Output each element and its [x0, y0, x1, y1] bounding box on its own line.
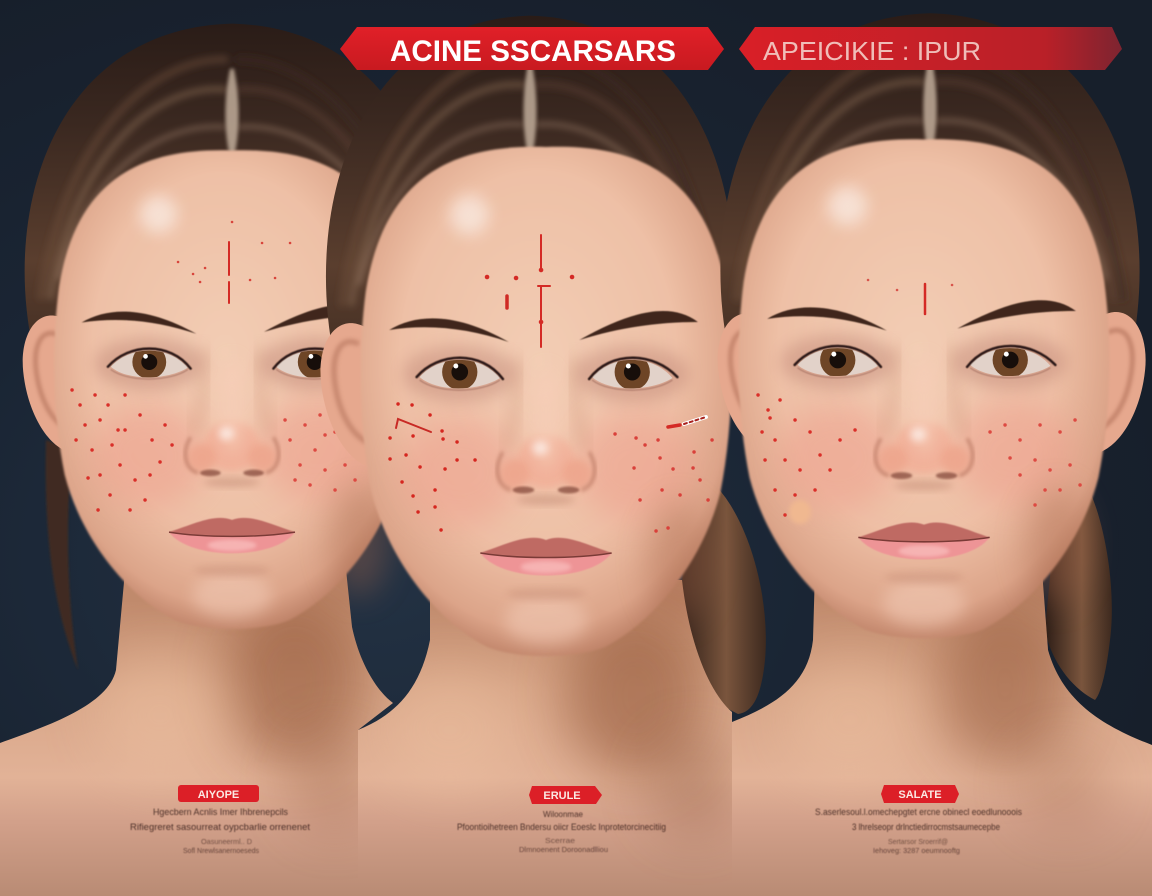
right caption text: 3 lhrelseopr drlnctiedirrocmstsaumecepbe [852, 822, 1000, 833]
right acne marks [758, 280, 1080, 515]
left caption text: Hgecbern Acnlis Imer Ihbrenepcils [153, 807, 288, 818]
left acne marks [72, 222, 355, 510]
right hair [720, 13, 1140, 425]
middle acne marks [390, 235, 712, 531]
panel: right portrait [718, 13, 1152, 896]
middle caption text: Dlmnoenent Doroonadlliou [519, 845, 608, 854]
right cheek patch [789, 500, 811, 524]
middle caption text [457, 809, 666, 854]
left neck and shoulders [0, 560, 393, 896]
title text: ACINE SSCARSARS [390, 35, 676, 68]
banner: main title [340, 27, 724, 70]
right neck and shoulders [732, 570, 1152, 896]
middle neck and shoulders [358, 580, 732, 896]
middle face [361, 147, 731, 656]
middle caption text: Scerrae [545, 836, 575, 845]
right caption text: Iehoveg: 3287 oeumnooftg [873, 846, 960, 855]
middle neck shading [380, 610, 740, 835]
middle hair [326, 16, 734, 431]
left caption text: Oasuneerml.. D [201, 837, 253, 846]
left face [54, 150, 410, 629]
left caption text [130, 807, 310, 855]
right label pill [881, 785, 959, 803]
right caption text [815, 807, 1022, 855]
caption: left panel [130, 785, 310, 855]
panel: left portrait [0, 24, 439, 896]
middle left ear [320, 323, 395, 468]
right label text: SALATE [898, 789, 942, 801]
left hair wisp [46, 440, 78, 670]
caption: right panel [815, 785, 1022, 855]
left hair [25, 24, 439, 418]
middle caption text: Wiloonmae [543, 809, 583, 819]
panel: middle portrait [320, 16, 766, 896]
middle ponytail [678, 470, 766, 714]
middle caption text: Pfoontioihetreen Bndersu oiicr Eoeslc Inprotetorcinecitiig [457, 822, 666, 833]
right ponytail [1045, 450, 1112, 700]
right left ear [718, 314, 788, 451]
right neck shading [785, 600, 1110, 825]
middle label pill [529, 786, 602, 804]
left neck shading [95, 595, 380, 830]
right caption text: Sertarsor Sroerrif@ [888, 837, 948, 846]
left caption text: Rifiegreret sasourreat oypcbarlie orrenenet [130, 822, 310, 833]
caption: middle panel [457, 786, 666, 854]
left label text: AIYOPE [198, 789, 239, 801]
middle label text: ERULE [543, 790, 581, 802]
second title text: APEICIKIE : IPUR [763, 36, 981, 66]
left caption text: Sofl Nrewlsanernoeseds [183, 846, 259, 855]
right face [739, 139, 1109, 638]
left ear [23, 316, 94, 453]
right caption text: S.aserlesoul.l.omechepgtet ercne obinecl eoedlunooois [815, 807, 1022, 818]
banner: second title [739, 27, 1122, 70]
left label pill [178, 785, 259, 802]
right right ear [1073, 312, 1146, 454]
